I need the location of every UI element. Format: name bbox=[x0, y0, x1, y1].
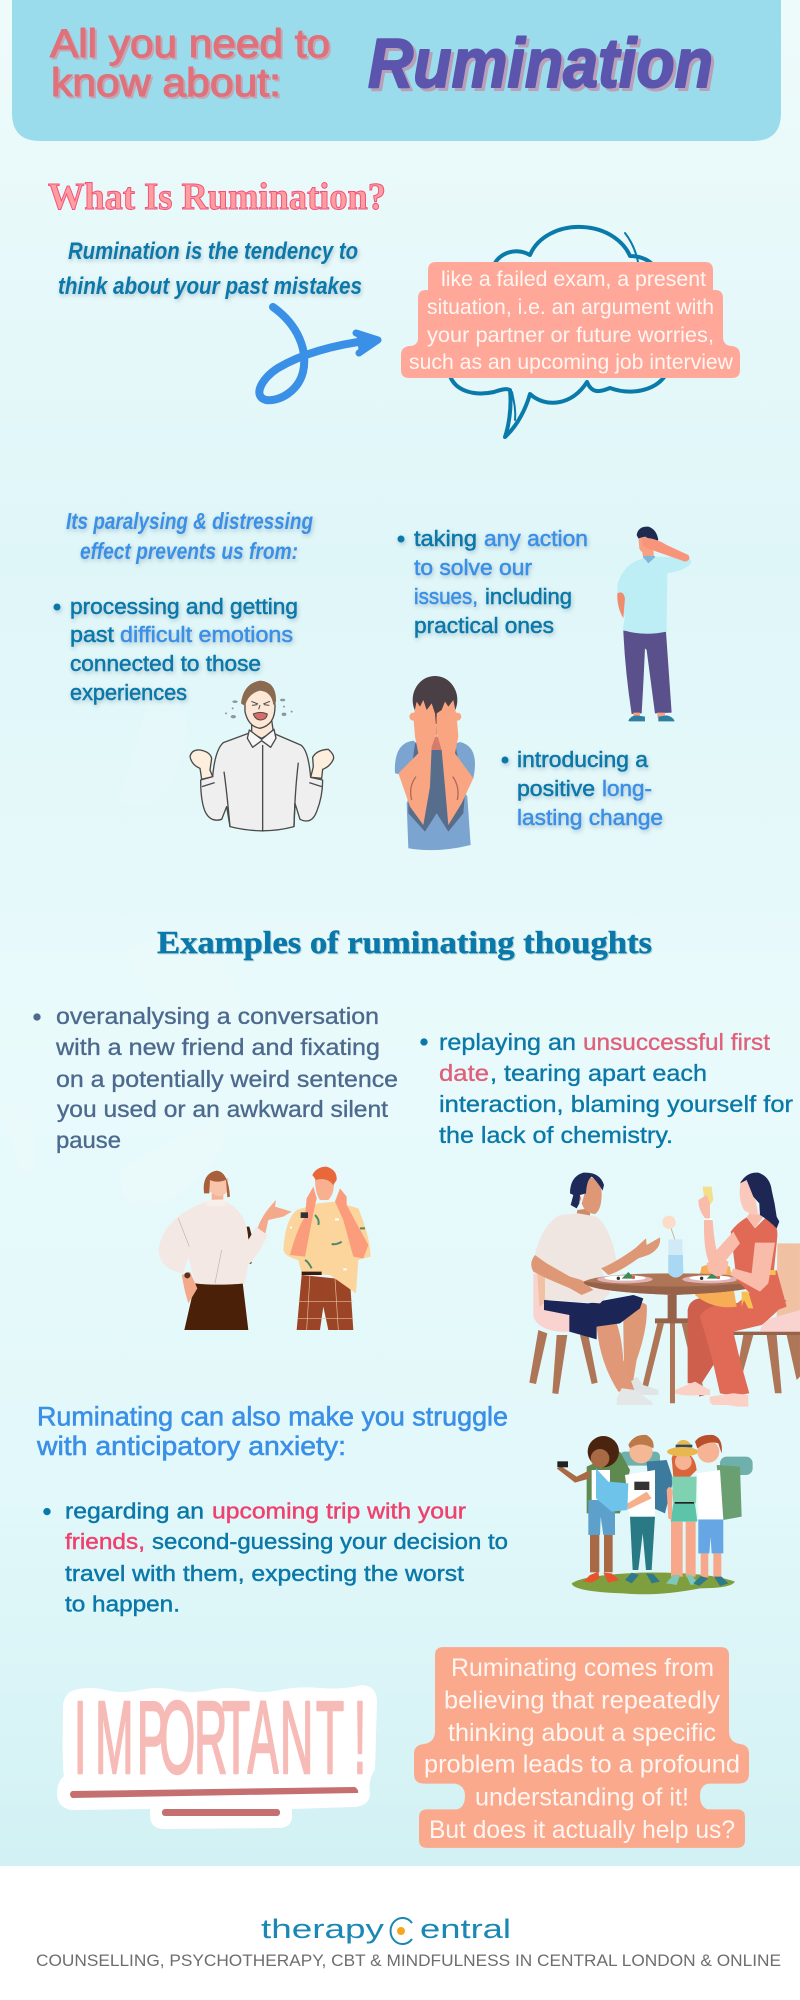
bullet: overanalysing a conversation: overanalysing a conversation bbox=[56, 1003, 379, 1029]
tagline: COUNSELLING, PSYCHOTHERAPY, CBT & MINDFULNESS IN CENTRAL LONDON & ONLINE bbox=[36, 1951, 781, 1970]
bullet: overanalysing a conversation: on a potentially weird sentence bbox=[56, 1066, 398, 1092]
callout: ruminating comes from: thinking about a specific bbox=[448, 1719, 716, 1747]
bullet: replaying a date: unsuccessful first bbox=[583, 1029, 771, 1055]
bullet: upcoming trip: friends, bbox=[65, 1529, 145, 1554]
bullet: overanalysing a conversation bbox=[34, 1003, 398, 1153]
bullet: taking action: practical ones bbox=[414, 613, 554, 638]
subheading: paralysing effect bbox=[66, 508, 313, 564]
bullet: replaying a date: date bbox=[439, 1060, 489, 1086]
footer bbox=[0, 1866, 800, 2000]
bullet: taking action: issues, bbox=[414, 584, 478, 609]
callout: example situations: your partner or future worries, bbox=[427, 324, 714, 347]
callout: ruminating comes from: problem leads to a profound bbox=[424, 1751, 740, 1779]
bullet: upcoming trip: regarding an bbox=[65, 1499, 204, 1523]
heading: anticipatory anxiety: Ruminating can also make you struggle bbox=[37, 1402, 508, 1431]
callout: ruminating comes from: But does it actually help us? bbox=[429, 1816, 735, 1844]
bullet: upcoming trip: travel with them, expecting the worst bbox=[65, 1561, 464, 1586]
sticker: important: IMPORTANT! bbox=[74, 1680, 366, 1795]
bullet: upcoming trip: second-guessing your decision to bbox=[152, 1529, 508, 1554]
bullet: introducing change: long- bbox=[602, 776, 652, 801]
heading: what is rumination: What Is Rumination? bbox=[48, 176, 386, 218]
bullet: taking action: taking bbox=[414, 526, 477, 551]
underlines bbox=[70, 1787, 358, 1816]
bullet: introducing change: lasting change bbox=[517, 805, 663, 830]
bullet: processing emotions: experiences bbox=[70, 680, 187, 705]
illustration: two people talking bbox=[158, 1167, 371, 1330]
logo: therapy central: entral bbox=[420, 1914, 511, 1944]
heading: anticipatory anxiety: with anticipatory anxiety: bbox=[36, 1431, 346, 1461]
bullet: replaying a date: the lack of chemistry. bbox=[439, 1122, 673, 1148]
bullet: introducing change bbox=[502, 747, 663, 830]
bullet: replaying a date bbox=[420, 1029, 793, 1148]
illustration: standing man covering eyes bbox=[617, 527, 692, 721]
speech bubble bbox=[450, 227, 665, 437]
bullet: processing emotions: processing and getting bbox=[70, 594, 298, 619]
logo: therapy central: therapy bbox=[261, 1914, 385, 1944]
callout: example situations: situation, i.e. an argument with bbox=[427, 296, 714, 319]
illustration: group of travellers bbox=[557, 1435, 753, 1594]
callout: example situations: like a failed exam, a present bbox=[441, 268, 706, 291]
callout: ruminating comes from: understanding of it! bbox=[475, 1784, 689, 1811]
definition text: Rumination is the tendency to bbox=[68, 238, 358, 265]
callout: ruminating comes from bbox=[414, 1647, 749, 1848]
bullet: processing emotions: past bbox=[70, 622, 114, 647]
definition text bbox=[58, 238, 362, 300]
subheading: paralysing effect: effect prevents us from: bbox=[80, 538, 298, 564]
subheading: paralysing effect: Its paralysing & distressing bbox=[66, 508, 313, 534]
illustration: couple on a date bbox=[529, 1173, 800, 1407]
bullet: processing emotions: connected to those bbox=[70, 651, 261, 676]
bullet: replaying a date: , tearing apart each bbox=[490, 1060, 707, 1086]
bullet: replaying a date: replaying an bbox=[439, 1029, 576, 1055]
bullet: upcoming trip: to happen. bbox=[65, 1592, 180, 1616]
callout: example situations: such as an upcoming job interview bbox=[409, 351, 734, 374]
bullet: taking action: to solve our bbox=[414, 555, 532, 580]
callout: example situations bbox=[401, 262, 740, 378]
bullet: upcoming trip bbox=[44, 1499, 508, 1616]
header intro text bbox=[50, 22, 330, 105]
bullet: overanalysing a conversation: pause bbox=[56, 1127, 121, 1153]
bullet: taking action: including bbox=[485, 584, 572, 609]
header banner bbox=[12, 0, 781, 141]
bullet: replaying a date: interaction, blaming yourself for bbox=[439, 1091, 793, 1117]
bullet: introducing change: positive bbox=[517, 776, 595, 801]
callout: ruminating comes from: believing that repeatedly bbox=[444, 1687, 721, 1714]
bullet: introducing change: introducing a bbox=[517, 747, 649, 772]
bullet: taking action bbox=[398, 526, 588, 638]
header intro text: know about: bbox=[51, 61, 281, 105]
illustration: distressed man bbox=[190, 681, 334, 832]
definition text: think about your past mistakes bbox=[58, 273, 362, 300]
bullet: upcoming trip: upcoming trip with your bbox=[212, 1499, 466, 1523]
header intro text: All you need to bbox=[50, 22, 330, 66]
heading: examples: Examples of ruminating thoughts bbox=[157, 924, 652, 960]
arrow bbox=[259, 307, 378, 400]
callout: ruminating comes from: Ruminating comes from bbox=[451, 1654, 714, 1682]
bullet: taking action: any action bbox=[484, 526, 588, 551]
illustration: person with hands on face bbox=[395, 676, 475, 850]
bullet: overanalysing a conversation: you used or an awkward silent bbox=[57, 1096, 389, 1122]
logo: therapy central bbox=[261, 1914, 511, 1944]
heading: anticipatory anxiety bbox=[36, 1402, 508, 1461]
bullet: overanalysing a conversation: with a new friend and fixating bbox=[55, 1034, 380, 1060]
bullet: processing emotions: difficult emotions bbox=[120, 622, 293, 647]
bullet: processing emotions bbox=[54, 594, 298, 705]
header title: Rumination bbox=[368, 24, 713, 102]
